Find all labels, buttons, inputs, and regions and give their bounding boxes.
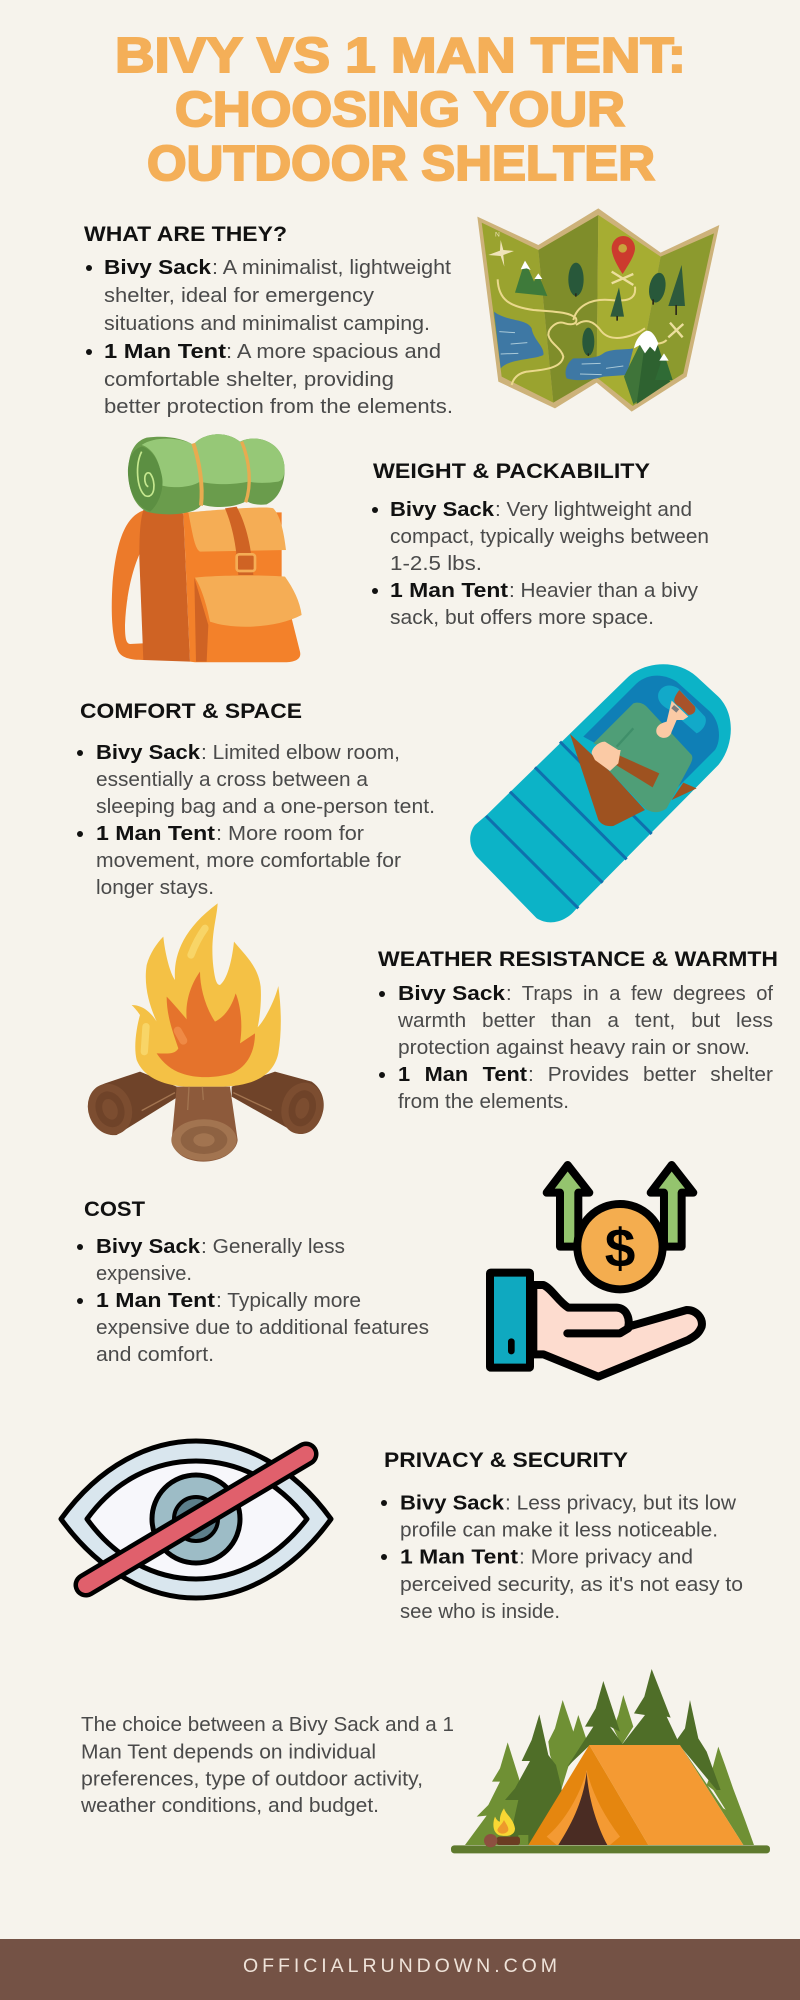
text block: privacy bullets: : Less privacy, but its low <box>505 1492 736 1514</box>
text block: cost bullets <box>77 1235 429 1366</box>
text block: privacy bullets: Bivy Sack <box>400 1492 505 1514</box>
title: CHOOSING YOUR <box>175 83 625 137</box>
text block: comfort bullets <box>77 741 435 899</box>
title: OUTDOOR SHELTER <box>147 137 655 191</box>
text block: conclusion: Man Tent depends on individual <box>81 1740 376 1764</box>
text block: cost bullets: and comfort. <box>96 1343 214 1366</box>
text block: weather bullets: from the elements. <box>398 1090 569 1113</box>
icon: folded map <box>477 208 719 412</box>
text block: weight bullets: Bivy Sack <box>390 498 495 521</box>
icon: folded map: N <box>495 232 500 239</box>
heading: cost: COST <box>84 1197 145 1221</box>
icon: hand holding coin with arrows: $ <box>605 1217 635 1279</box>
text block: privacy bullets: perceived security, as it's not easy to <box>400 1573 743 1596</box>
panel: conclusion <box>80 1669 770 1853</box>
text block: weather bullets: : Provides better shelter <box>528 1063 773 1086</box>
text block: what are they bullets: : A more spacious and <box>226 340 441 363</box>
panel: cost <box>77 1165 702 1377</box>
text block: what are they bullets: better protection from the elements. <box>104 395 453 418</box>
heading: weather resistance and warmth: WEATHER RESISTANCE & WARMTH <box>378 947 778 971</box>
text block: weather bullets: Bivy Sack <box>398 982 506 1005</box>
text block: cost bullets: Bivy Sack <box>96 1235 201 1258</box>
icon: hand holding coin with arrows <box>490 1165 702 1377</box>
text block: privacy bullets: 1 Man Tent <box>400 1546 518 1568</box>
text block: comfort bullets: movement, more comfortable for <box>96 849 401 872</box>
text block: comfort bullets: essentially a cross between a <box>96 768 369 791</box>
text block: conclusion: weather conditions, and budget. <box>80 1794 379 1817</box>
panel: comfort and space <box>77 664 731 922</box>
text block: privacy bullets: see who is inside. <box>400 1600 560 1623</box>
text block: cost bullets: expensive due to additional features <box>96 1316 429 1339</box>
text block: weight bullets: sack, but offers more space. <box>390 606 654 629</box>
icon: campfire <box>81 903 329 1162</box>
title: BIVY VS 1 MAN TENT: <box>115 29 686 83</box>
icon: person in sleeping bag <box>470 664 731 922</box>
text block: weight bullets: 1 Man Tent <box>390 579 508 602</box>
text block: privacy bullets <box>381 1492 743 1623</box>
title <box>115 29 686 191</box>
text block: weight bullets: : Heavier than a bivy <box>509 579 699 602</box>
text block: weather bullets: protection against heavy rain or snow. <box>398 1036 750 1059</box>
text block: what are they bullets: situations and minimalist camping. <box>104 312 430 335</box>
text block: comfort bullets: : Limited elbow room, <box>201 741 400 764</box>
text block: cost bullets: 1 Man Tent <box>96 1289 215 1312</box>
text block: comfort bullets: Bivy Sack <box>96 741 201 764</box>
text block: what are they bullets: 1 Man Tent <box>104 340 226 363</box>
text block: cost bullets: : Generally less <box>201 1235 345 1258</box>
text block: what are they bullets <box>86 256 453 418</box>
text block: conclusion: The choice between a Bivy Sack and a 1 <box>81 1713 454 1736</box>
footer band: OFFICIALRUNDOWN.COM <box>243 1955 557 1977</box>
text block: comfort bullets: 1 Man Tent <box>96 822 215 845</box>
text block: privacy bullets: profile can make it less noticeable. <box>400 1518 718 1542</box>
text block: what are they bullets: Bivy Sack <box>104 256 212 279</box>
heading: weight and packability: WEIGHT & PACKABILITY <box>373 459 650 483</box>
text block: conclusion <box>80 1713 454 1817</box>
text block: privacy bullets: : More privacy and <box>519 1546 693 1568</box>
panel: privacy and security <box>61 1441 743 1623</box>
heading: privacy and security: PRIVACY & SECURITY <box>384 1448 628 1472</box>
heading: what are they: WHAT ARE THEY? <box>84 222 287 246</box>
text block: what are they bullets: : A minimalist, lightweight <box>212 256 451 279</box>
text block: weight bullets: 1-2.5 lbs. <box>390 552 482 575</box>
icon: crossed-out eye <box>61 1441 331 1598</box>
text block: comfort bullets: sleeping bag and a one-person tent. <box>96 795 435 818</box>
text block: comfort bullets: : More room for <box>216 822 364 845</box>
text block: cost bullets: expensive. <box>96 1262 192 1285</box>
text block: comfort bullets: longer stays. <box>96 876 214 899</box>
text block: what are they bullets: shelter, ideal for emergency <box>104 284 375 307</box>
panel: what are they <box>84 208 719 418</box>
text block: conclusion: preferences, type of outdoor activity, <box>81 1768 423 1790</box>
text block: weight bullets: : Very lightweight and <box>495 498 692 521</box>
text block: what are they bullets: comfortable shelter, providing <box>104 368 394 391</box>
text block: weight bullets <box>372 498 709 629</box>
icon: tent among trees with campfire <box>451 1669 770 1853</box>
text block: weather bullets: : Traps in a few degrees of <box>506 982 773 1005</box>
text block: cost bullets: : Typically more <box>216 1289 361 1312</box>
icon: backpack <box>112 434 302 662</box>
text block: weight bullets: compact, typically weighs between <box>390 525 709 548</box>
panel: weather resistance and warmth <box>81 903 778 1162</box>
panel: weight and packability <box>112 434 709 662</box>
text block: weather bullets <box>379 982 773 1113</box>
text block: weather bullets: warmth better than a tent, but less <box>397 1009 773 1032</box>
text block: weather bullets: 1 Man Tent <box>398 1063 527 1086</box>
heading: comfort and space: COMFORT & SPACE <box>80 699 302 723</box>
footer band <box>0 1939 800 2000</box>
